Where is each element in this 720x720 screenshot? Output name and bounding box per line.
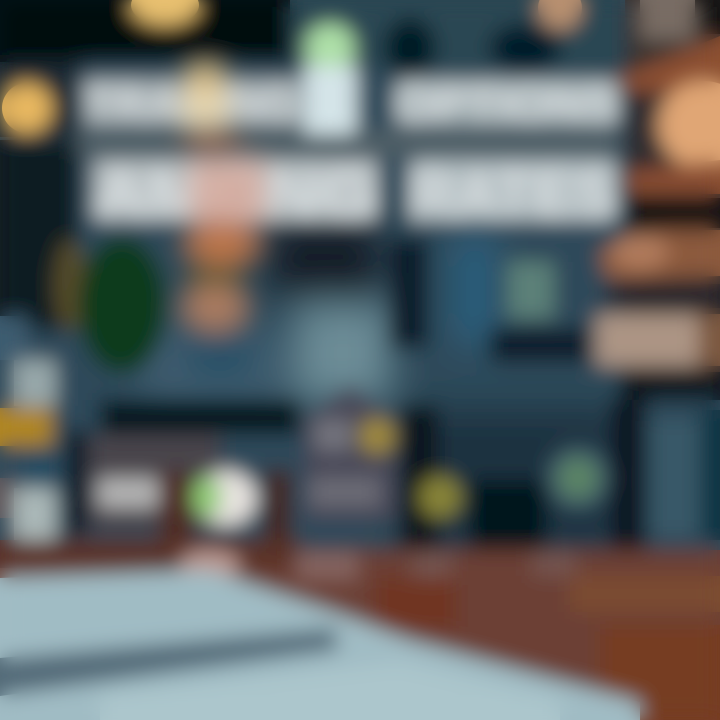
person [179,62,265,375]
paper dark stripe [0,628,338,696]
title text [84,78,618,230]
right wall columns [390,238,590,362]
title line 3: AMONG [94,156,377,230]
title line 4: RATES [410,156,616,230]
table highlights [180,550,576,580]
lower objects [66,385,720,555]
glass tube [304,24,356,134]
title backing blocks [78,80,618,220]
bottles left [0,316,56,544]
plant [54,237,166,373]
title line 1: TRADING [84,78,300,131]
shelves right [596,0,720,400]
wooden table [0,540,720,720]
ceiling lights [2,0,582,133]
title line 2: OPTIONS [396,78,618,131]
paper lower highlight [100,662,560,720]
paper on table [0,570,640,720]
wall tones [140,225,620,550]
